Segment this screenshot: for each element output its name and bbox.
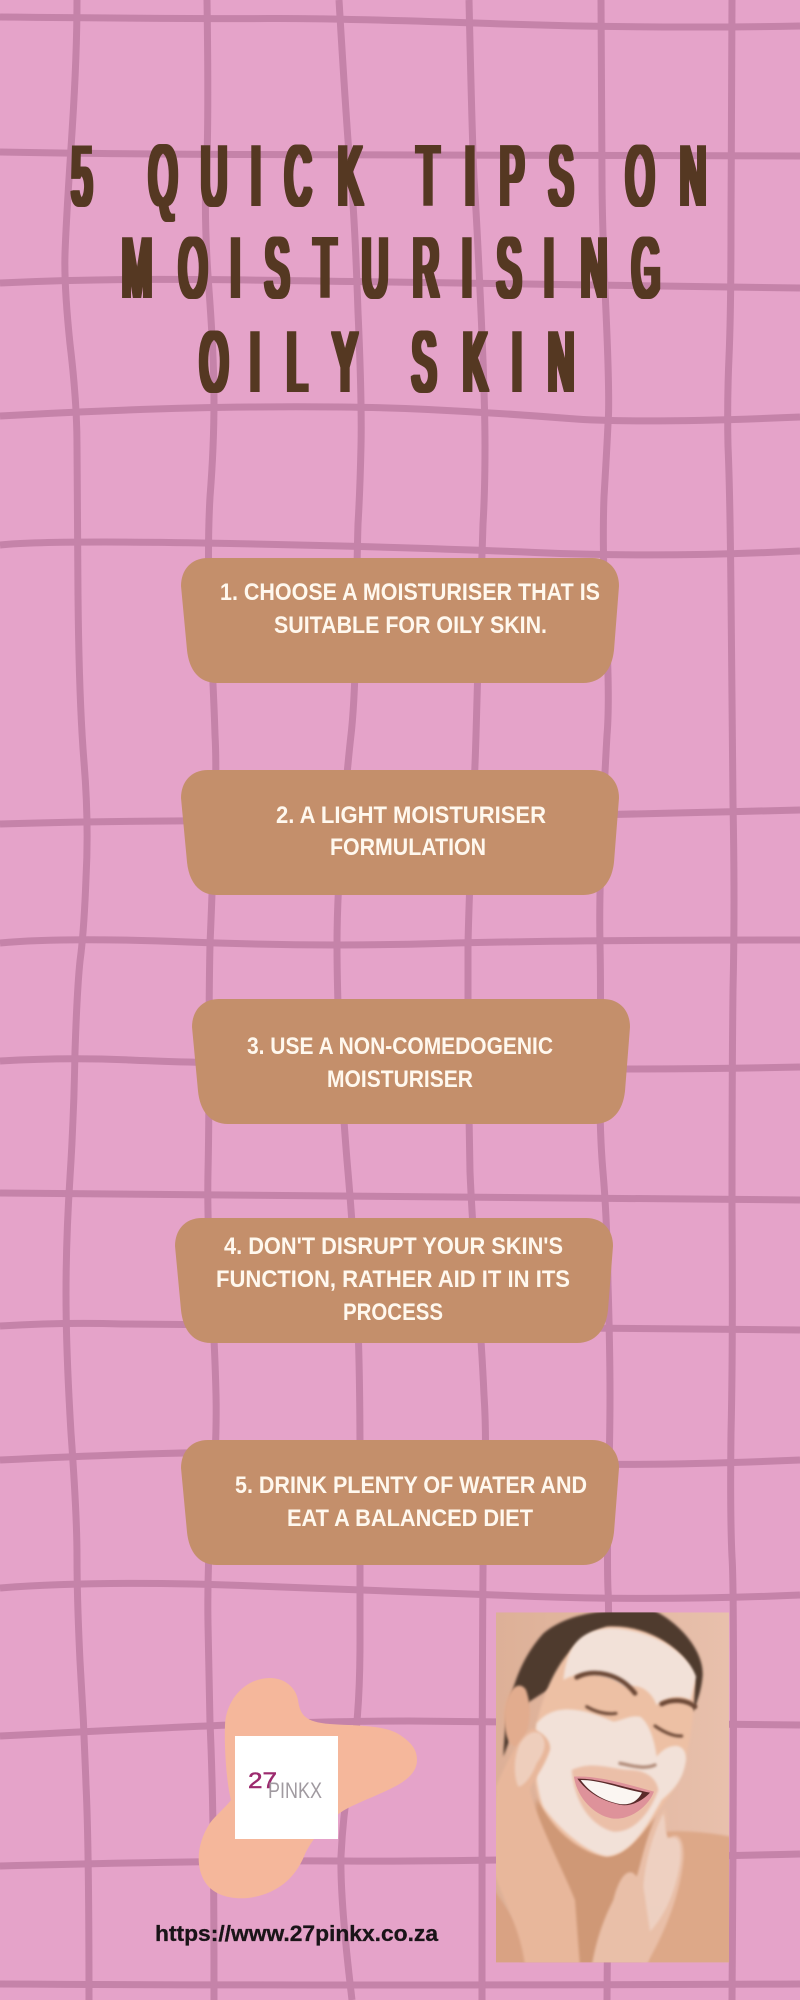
panel: tip 1: 1. CHOOSE A MOISTURISER THAT IS [220,579,600,606]
panel: tip 4: PROCESS [343,1299,443,1326]
title: MOISTURISING [122,220,660,315]
panel: tip 2: 2. A LIGHT MOISTURISER [276,802,546,829]
left shoulder [496,1892,524,1962]
hair [503,1610,703,1757]
panel: tip 2 [181,770,619,895]
skin around mouth [572,1766,658,1832]
mouth [574,1776,654,1819]
logo: 27 Pinkx [235,1736,338,1839]
panel: tip 4: 4. DON'T DISRUPT YOUR SKIN'S [224,1233,563,1260]
panel: tip 5 [181,1440,619,1565]
panel: tip 5: EAT A BALANCED DIET [287,1505,533,1532]
ear [504,1686,530,1747]
right shoulder [648,1830,729,1962]
panel: tip 2: FORMULATION [330,834,486,861]
cheek, nose and chin mask [535,1709,686,1856]
panel: tip 3: MOISTURISER [327,1066,473,1093]
logo: 27 Pinkx: PINKX [268,1778,322,1803]
title: OILY SKIN [200,314,574,409]
left hand foam [515,1732,545,1787]
website url: https://www.27pinkx.co.za [155,1921,439,1946]
panel: tip 1: SUITABLE FOR OILY SKIN. [274,612,547,639]
panel: tip 5: 5. DRINK PLENTY OF WATER AND [235,1472,587,1499]
brows and eyes [577,1673,695,1767]
right hand [592,1822,684,1962]
panel: tip 3: 3. USE A NON-COMEDOGENIC [247,1033,553,1060]
neck [520,1800,653,1967]
logo: 27 Pinkx: 27 [248,1768,277,1793]
face [533,1626,695,1857]
right hand foam [643,1813,681,1932]
panel: tip 4 [175,1218,613,1343]
logo blob [199,1678,417,1898]
panel: tip 4: FUNCTION, RATHER AID IT IN ITS [216,1266,570,1293]
photo: woman with face mask [490,1610,737,1970]
panel: tip 1 [181,558,619,683]
left hand [493,1728,580,1967]
title [72,128,706,409]
forehead mask [563,1628,696,1705]
title: 5 QUICK TIPS ON [72,128,706,223]
panel: tip 3 [192,999,630,1124]
